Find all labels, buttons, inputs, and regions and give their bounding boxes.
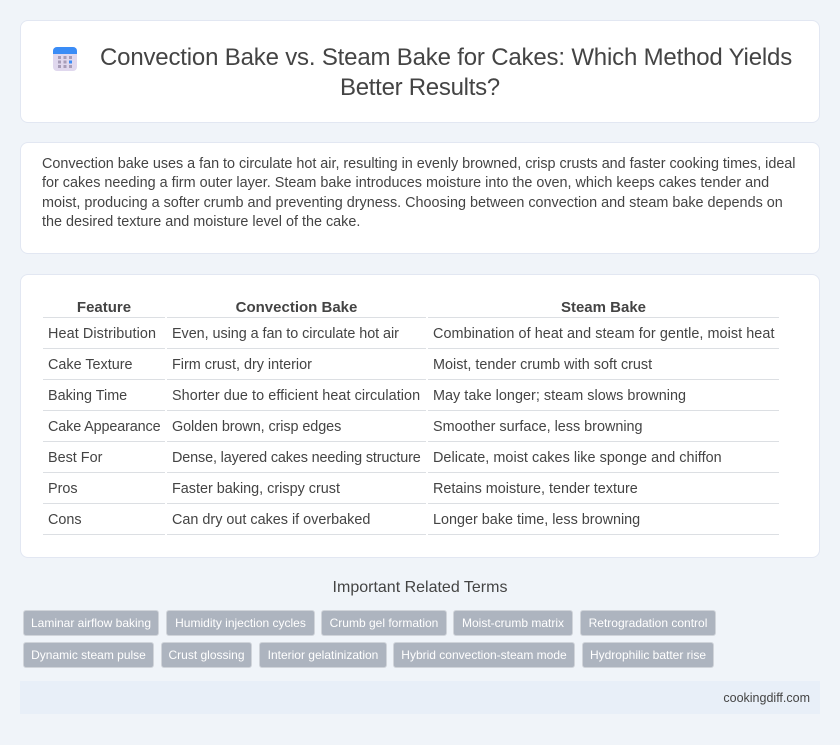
related terms tags: Moist-crumb matrix xyxy=(462,616,564,630)
comparison table: Baking Time xyxy=(48,388,127,404)
comparison table: Steam Bake xyxy=(561,299,646,316)
text block: introduction xyxy=(42,156,795,230)
title xyxy=(100,44,792,101)
related terms tags: Dynamic steam pulse xyxy=(31,648,146,662)
text block: introduction: Convection bake uses a fan to circulate hot air, resulting in evenly browned, crisp crusts and faster cooking times, ideal xyxy=(42,156,795,172)
related terms tags: Hybrid convection-steam mode xyxy=(401,648,567,662)
comparison table: Dense, layered cakes needing structure xyxy=(172,450,421,466)
comparison table: Shorter due to efficient heat circulation xyxy=(172,388,420,404)
comparison table: Best For xyxy=(48,450,102,466)
related terms tags: Laminar airflow baking xyxy=(31,616,151,630)
text block: introduction: moist, producing a softer crumb and preventing dryness. Choosing between convection and steam bake depends on xyxy=(42,195,783,211)
related terms tags: Crumb gel formation xyxy=(330,616,438,630)
comparison table: Firm crust, dry interior xyxy=(172,357,312,373)
related terms tags: Crust glossing xyxy=(168,648,245,662)
footer text: source: cookingdiff.com xyxy=(723,691,810,705)
panel: comparison table xyxy=(20,274,820,558)
comparison table: Even, using a fan to circulate hot air xyxy=(172,326,399,342)
comparison table: Smoother surface, less browning xyxy=(433,419,643,435)
comparison table: Longer bake time, less browning xyxy=(433,512,640,528)
comparison table: Combination of heat and steam for gentle, moist heat xyxy=(433,326,774,342)
text block: introduction: the desired texture and moisture level of the cake. xyxy=(42,214,360,230)
heading: related terms: Important Related Terms xyxy=(333,579,507,596)
comparison table: Retains moisture, tender texture xyxy=(433,481,638,497)
comparison table: Faster baking, crispy crust xyxy=(172,481,340,497)
panel: title card xyxy=(20,20,820,123)
text block: introduction: for cakes needing a firm outer layer. Steam bake introduces moisture into the oven, which keeps cakes tender and xyxy=(42,175,769,191)
title: Convection Bake vs. Steam Bake for Cakes: Which Method Yields xyxy=(100,44,792,71)
related terms tags: Humidity injection cycles xyxy=(175,616,306,630)
icon: calendar xyxy=(53,47,77,71)
comparison table: Pros xyxy=(48,481,78,497)
comparison table: Convection Bake xyxy=(236,299,357,316)
comparison table: Golden brown, crisp edges xyxy=(172,419,341,435)
comparison table: May take longer; steam slows browning xyxy=(433,388,686,404)
related terms tags: Retrogradation control xyxy=(589,616,707,630)
comparison table: Cake Texture xyxy=(48,357,133,373)
comparison table xyxy=(43,299,779,535)
related terms tags: Hydrophilic batter rise xyxy=(590,648,706,662)
footer xyxy=(20,681,820,714)
comparison table: Delicate, moist cakes like sponge and chiffon xyxy=(433,450,722,466)
related terms tags xyxy=(23,610,716,668)
related terms tags: Interior gelatinization xyxy=(268,648,378,662)
comparison table: Cake Appearance xyxy=(48,419,160,435)
comparison table: Moist, tender crumb with soft crust xyxy=(433,357,652,373)
comparison table: Heat Distribution xyxy=(48,326,156,342)
comparison table: Feature xyxy=(77,299,131,316)
title: Better Results? xyxy=(340,74,500,101)
comparison table: Can dry out cakes if overbaked xyxy=(172,512,370,528)
panel: introduction xyxy=(20,142,820,254)
comparison table: Cons xyxy=(48,512,82,528)
